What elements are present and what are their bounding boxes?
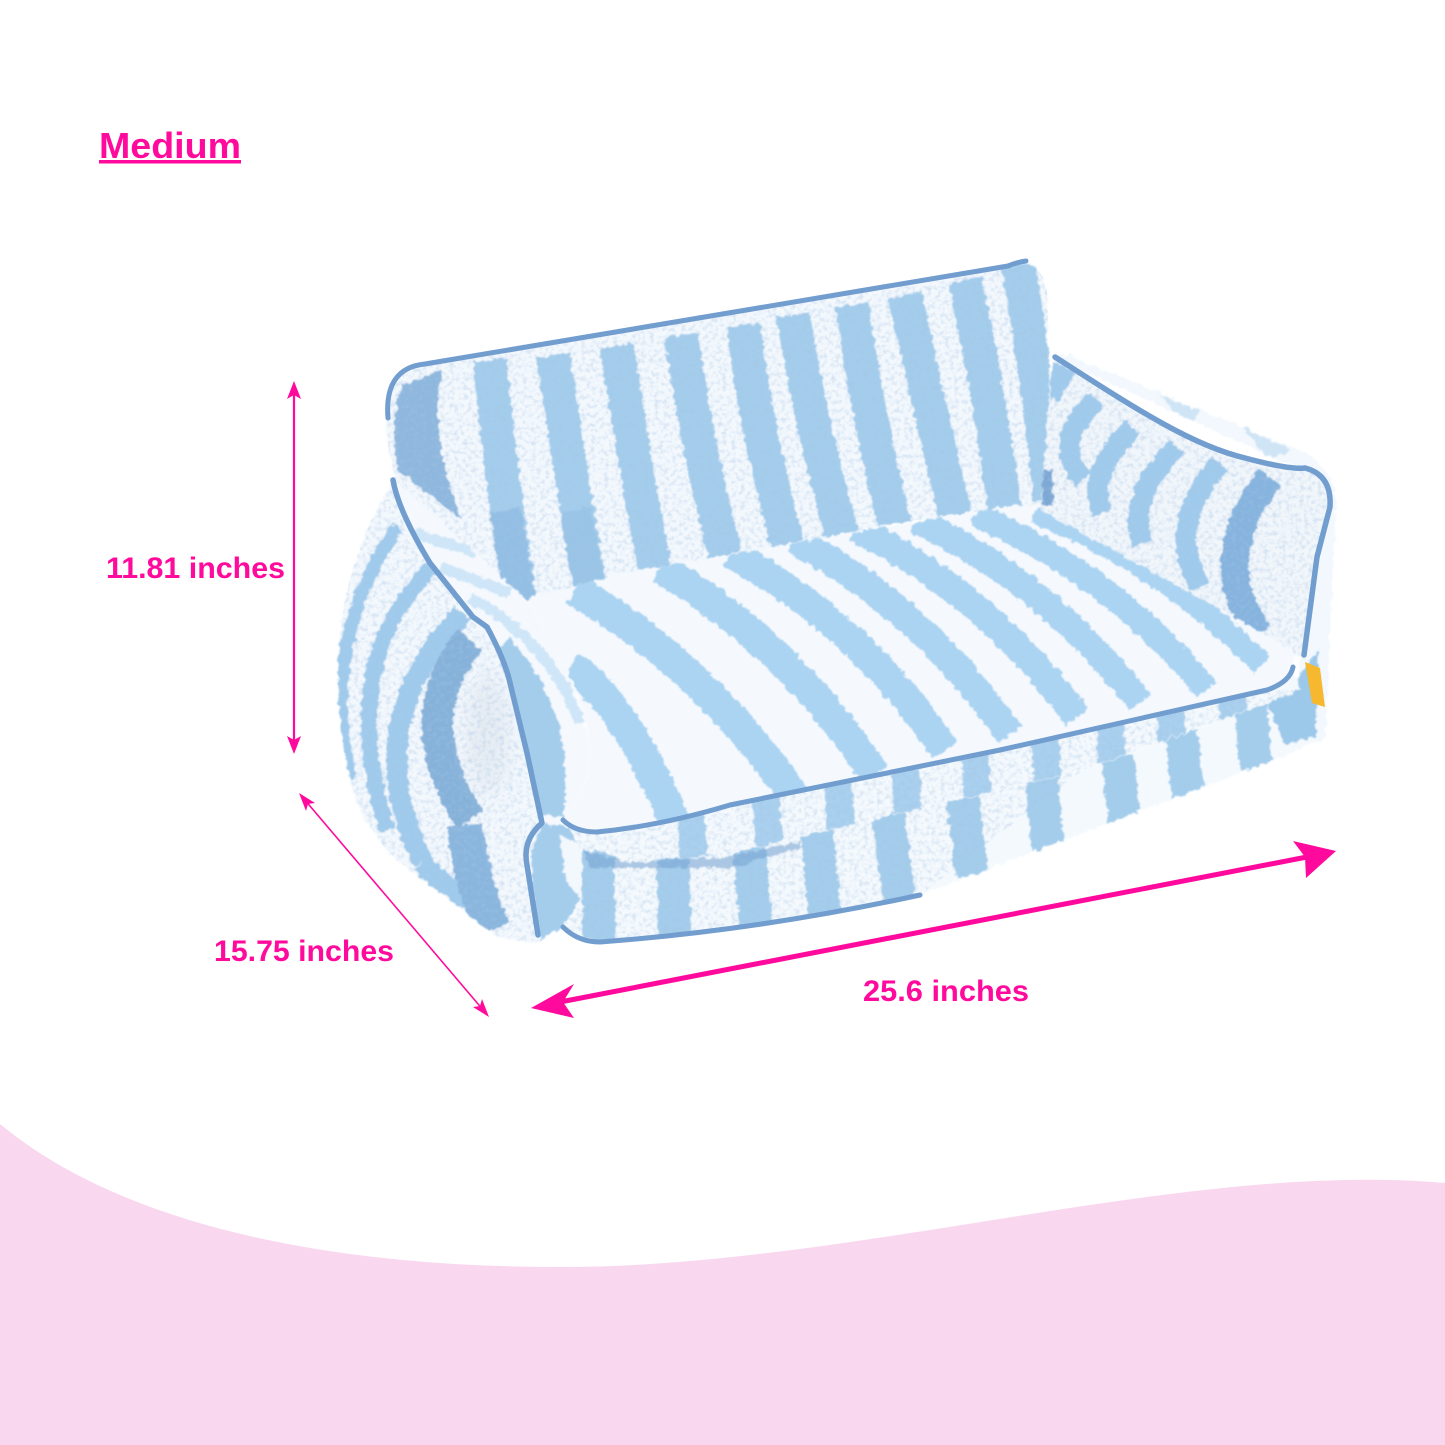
blue piping: [388, 261, 1330, 942]
left arm top and fold: [397, 486, 590, 942]
dimension: width: 25.6 inches: [863, 975, 1029, 1008]
dimension: depth: [214, 793, 489, 1017]
pink wave footer: [0, 1124, 1445, 1445]
front band of seat cushion: [574, 674, 1302, 861]
dimension: width: [531, 841, 1336, 1018]
dimension: height: 11.81 inches: [106, 552, 285, 585]
backrest cushion: [386, 263, 1052, 602]
dimension: height: [106, 381, 301, 754]
right arm rear edge: [1060, 354, 1337, 742]
icon: yellow brand tag: [1305, 662, 1325, 707]
seat cushion: [520, 490, 1310, 840]
left arm outer side: [336, 486, 540, 942]
right arm: [1040, 360, 1322, 656]
product photo: striped sofa bed: [320, 250, 1350, 960]
lower base cushion: [565, 650, 1320, 940]
fleece texture overlay: [330, 255, 1340, 955]
title: Medium: Medium: [99, 125, 241, 166]
dimension: depth: 15.75 inches: [214, 935, 394, 968]
